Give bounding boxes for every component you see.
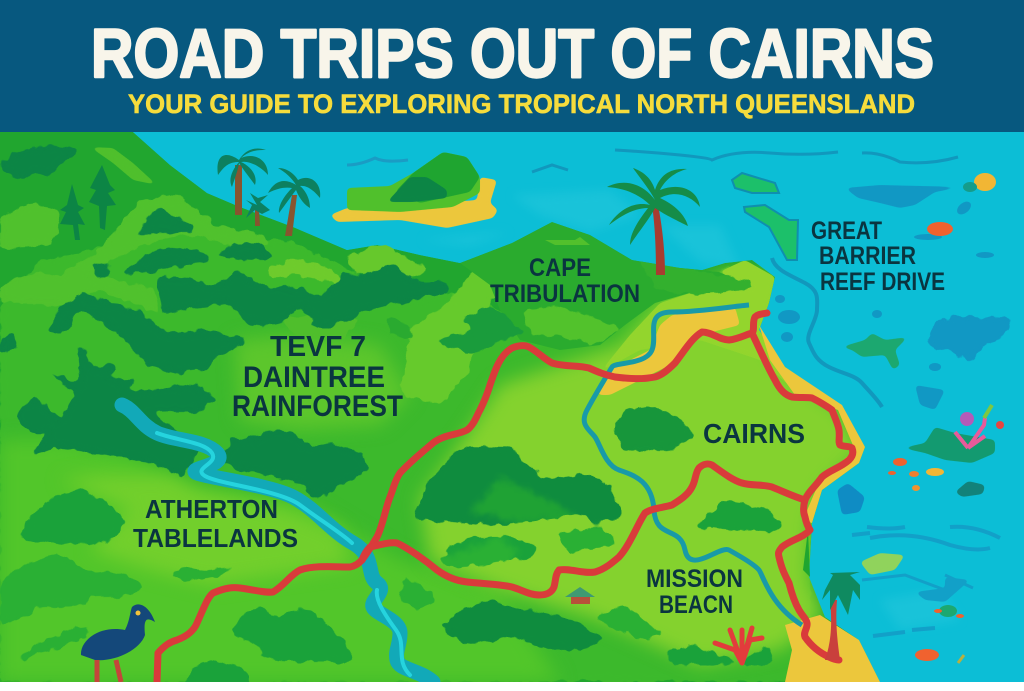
coast palm: [822, 572, 860, 660]
label: Mission Beach: BEACN: [659, 591, 733, 619]
mid-green hills: [0, 405, 784, 690]
left river: [122, 405, 433, 682]
label: Cape Tribulation: [490, 258, 638, 302]
label: Daintree Rainforest: RAINFOREST: [232, 390, 403, 423]
label: Atherton Tablelands: ATHERTON: [145, 494, 278, 524]
land: [0, 132, 880, 682]
sea turtle: [846, 334, 904, 368]
red coral: [715, 628, 762, 663]
header banner: [0, 0, 1024, 132]
label: Mission Beach: [648, 569, 742, 613]
palm trees: [217, 148, 320, 236]
water wave: [347, 158, 408, 165]
right river: [584, 305, 802, 625]
sand: [597, 307, 880, 682]
coral rock: [902, 405, 1004, 463]
label: Great Barrier Reef Drive: BARRIER: [819, 242, 916, 270]
label: Great Barrier Reef Drive: GREAT: [811, 217, 882, 245]
fir trees: [60, 165, 116, 240]
label: Great Barrier Reef Drive: [812, 221, 944, 290]
label: Atherton Tablelands: TABLELANDS: [133, 523, 298, 553]
label: Cape Tribulation: CAPE: [529, 254, 591, 282]
label: Great Barrier Reef Drive: REEF DRIVE: [820, 268, 945, 296]
label: Daintree Rainforest: DAINTREE: [243, 361, 385, 394]
cassowary bird: [81, 604, 155, 682]
roads: [157, 313, 853, 682]
label: Cape Tribulation: TRIBULATION: [490, 280, 640, 308]
label: Atherton Tablelands: [133, 500, 298, 548]
small island: [330, 152, 498, 228]
lime band patches: [0, 195, 430, 340]
big palm: [607, 168, 700, 275]
reef features: [532, 150, 1012, 410]
label: Daintree Rainforest: [234, 366, 403, 416]
sea: [133, 132, 1024, 682]
hut: [565, 587, 595, 604]
label: garbled line: TEVF 7: [270, 331, 366, 363]
subtitle: YOUR GUIDE TO EXPLORING TROPICAL NORTH QUEENSLAND: [128, 89, 915, 119]
label: Mission Beach: MISSION: [646, 565, 743, 593]
forest: [0, 145, 528, 500]
sea light patches: [526, 192, 952, 626]
reef fish and rocks: [837, 458, 1000, 663]
label: Cairns: CAIRNS: [703, 418, 805, 449]
